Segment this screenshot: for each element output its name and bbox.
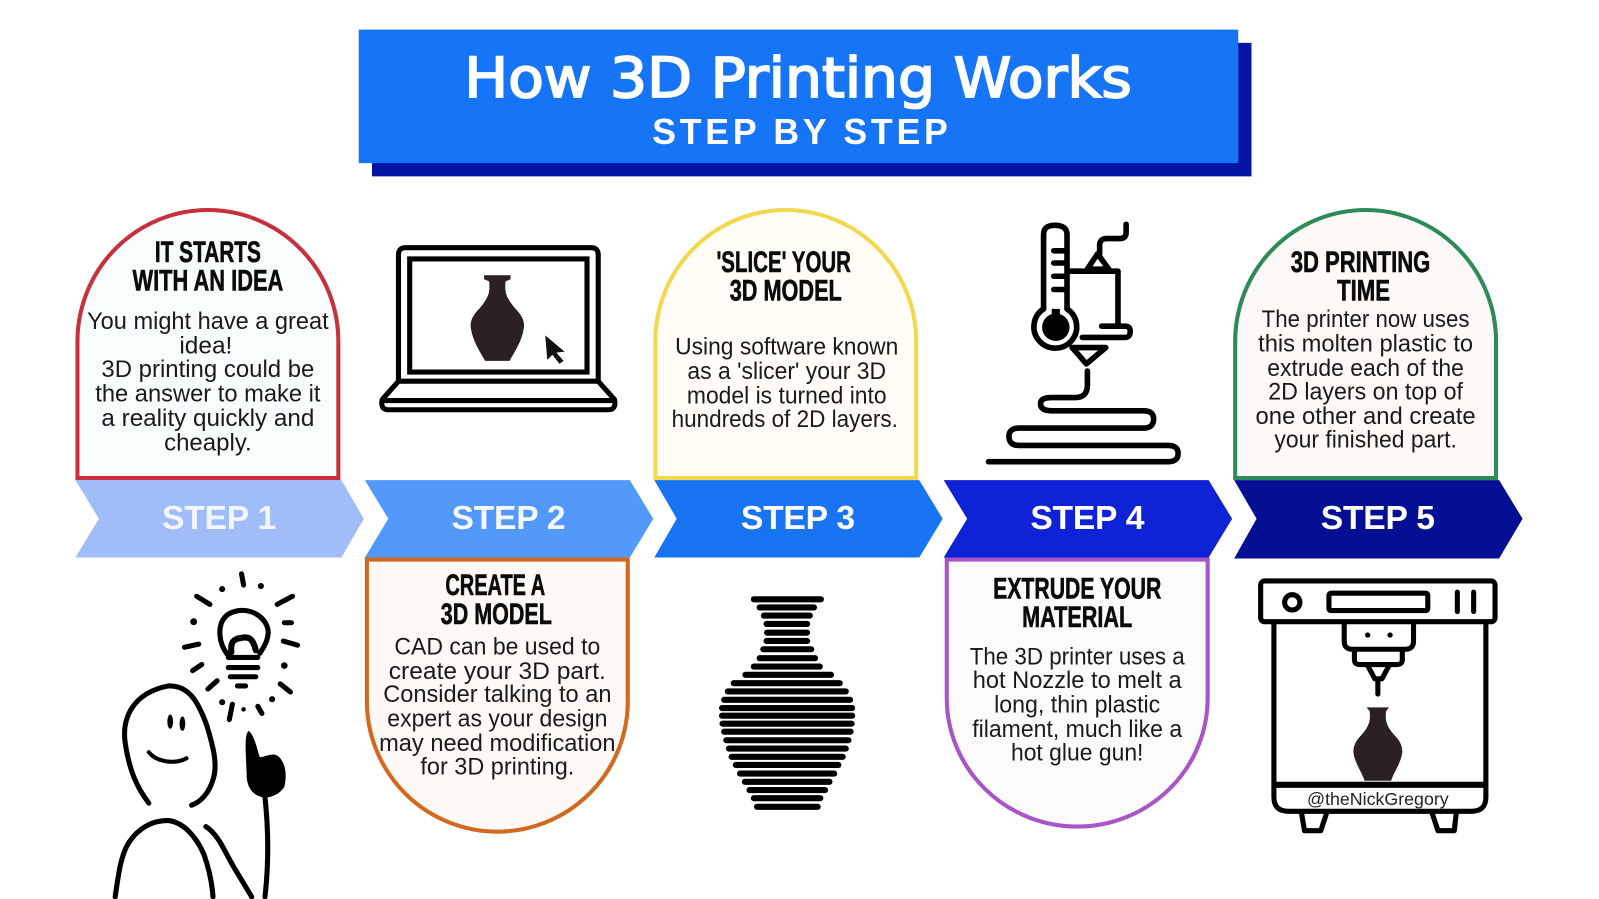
heading: slice your 3d model: 'SLICE' YOUR xyxy=(716,246,851,279)
heading: create a 3d model xyxy=(441,569,552,631)
panel: step 3 slice xyxy=(655,210,916,478)
body text: step 4: filament, much like a xyxy=(972,716,1183,743)
heading: it starts with an idea: IT STARTS xyxy=(155,236,261,269)
heading: slice your 3d model: 3D MODEL xyxy=(730,275,842,308)
body text: step 5: The printer now uses xyxy=(1262,306,1470,333)
icon: person with lightbulb idea xyxy=(115,574,298,897)
body text: step 5: one other and create xyxy=(1256,403,1476,430)
heading: create a 3d model: CREATE A xyxy=(445,569,545,602)
body text: step 1: a reality quickly and xyxy=(101,405,314,432)
title text: How 3D Printing Works xyxy=(464,46,1132,110)
body text: step 2 xyxy=(379,633,616,781)
arrow: step 3 xyxy=(654,480,943,558)
arrow: step 2: STEP 2 xyxy=(451,500,566,537)
heading: extrude your material: EXTRUDE YOUR xyxy=(993,572,1161,605)
body text: step 4: hot glue gun! xyxy=(1011,739,1143,766)
body text: step 2: CAD can be used to xyxy=(394,633,600,660)
body text: step 1: 3D printing could be xyxy=(101,356,314,383)
arrow: step 3: STEP 3 xyxy=(741,500,855,537)
body text: step 3: hundreds of 2D layers. xyxy=(672,406,898,433)
body text: step 1: cheaply. xyxy=(164,430,252,457)
arrow: step 5: STEP 5 xyxy=(1321,500,1435,537)
title banner xyxy=(359,30,1251,176)
body text: step 4: hot Nozzle to melt a xyxy=(973,667,1182,694)
heading: extrude your material: MATERIAL xyxy=(1022,601,1132,634)
body text: step 5 xyxy=(1256,306,1476,453)
body text: step 5: 2D layers on top of xyxy=(1268,379,1463,406)
body text: step 1: the answer to make it xyxy=(95,381,321,408)
heading: 3d printing time: TIME xyxy=(1337,275,1390,308)
panel: step 1 idea xyxy=(77,210,338,478)
heading: 3d printing time xyxy=(1291,246,1430,308)
body text: step 1: idea! xyxy=(179,333,232,360)
body text: step 2: create your 3D part. xyxy=(389,658,606,685)
panel: step 2 create model xyxy=(367,560,628,832)
body text: step 1: You might have a great xyxy=(87,308,329,335)
body text: step 5: this molten plastic to xyxy=(1258,331,1473,358)
body text: step 3: model is turned into xyxy=(687,383,887,410)
heading: slice your 3d model xyxy=(716,246,851,308)
body text: step 3: as a 'slicer' your 3D xyxy=(687,358,886,385)
body text: step 1 xyxy=(87,308,329,457)
arrow: step 1: STEP 1 xyxy=(162,500,276,537)
body text: step 4: long, thin plastic xyxy=(994,691,1160,718)
arrow: step 4: STEP 4 xyxy=(1030,500,1145,537)
icon: laptop with vase xyxy=(382,248,615,410)
body text: step 2: Consider talking to an xyxy=(383,681,611,708)
icon: sliced vase layers xyxy=(719,596,855,810)
panel: step 5 printing time xyxy=(1235,210,1496,478)
credit handle: @theNickGregory xyxy=(1307,789,1449,809)
body text: step 4: The 3D printer uses a xyxy=(970,644,1185,671)
body text: step 5: your finished part. xyxy=(1274,426,1457,453)
heading: it starts with an idea xyxy=(132,236,283,298)
heading: it starts with an idea: WITH AN IDEA xyxy=(132,265,283,298)
body text: step 3: Using software known xyxy=(675,334,898,361)
heading: create a 3d model: 3D MODEL xyxy=(441,598,552,631)
arrow: step 4 xyxy=(944,480,1232,558)
arrow: step 1 xyxy=(75,480,364,558)
body text: step 2: for 3D printing. xyxy=(420,754,574,781)
arrow: step 2 xyxy=(365,480,653,558)
arrow: step 5 xyxy=(1234,480,1523,559)
heading: 3d printing time: 3D PRINTING xyxy=(1291,246,1430,279)
icon: 3d printer xyxy=(1261,581,1495,831)
body text: step 2: may need modification xyxy=(379,730,616,757)
panel: step 4 extrude material xyxy=(947,560,1208,827)
body text: step 3 xyxy=(672,334,898,433)
body text: step 5: extrude each of the xyxy=(1267,355,1464,382)
heading: extrude your material xyxy=(993,572,1161,634)
icon: extruder and thermometer xyxy=(989,224,1178,462)
subtitle text: STEP BY STEP xyxy=(652,112,948,152)
body text: step 2: expert as your design xyxy=(387,706,607,733)
body text: step 4 xyxy=(970,644,1185,766)
